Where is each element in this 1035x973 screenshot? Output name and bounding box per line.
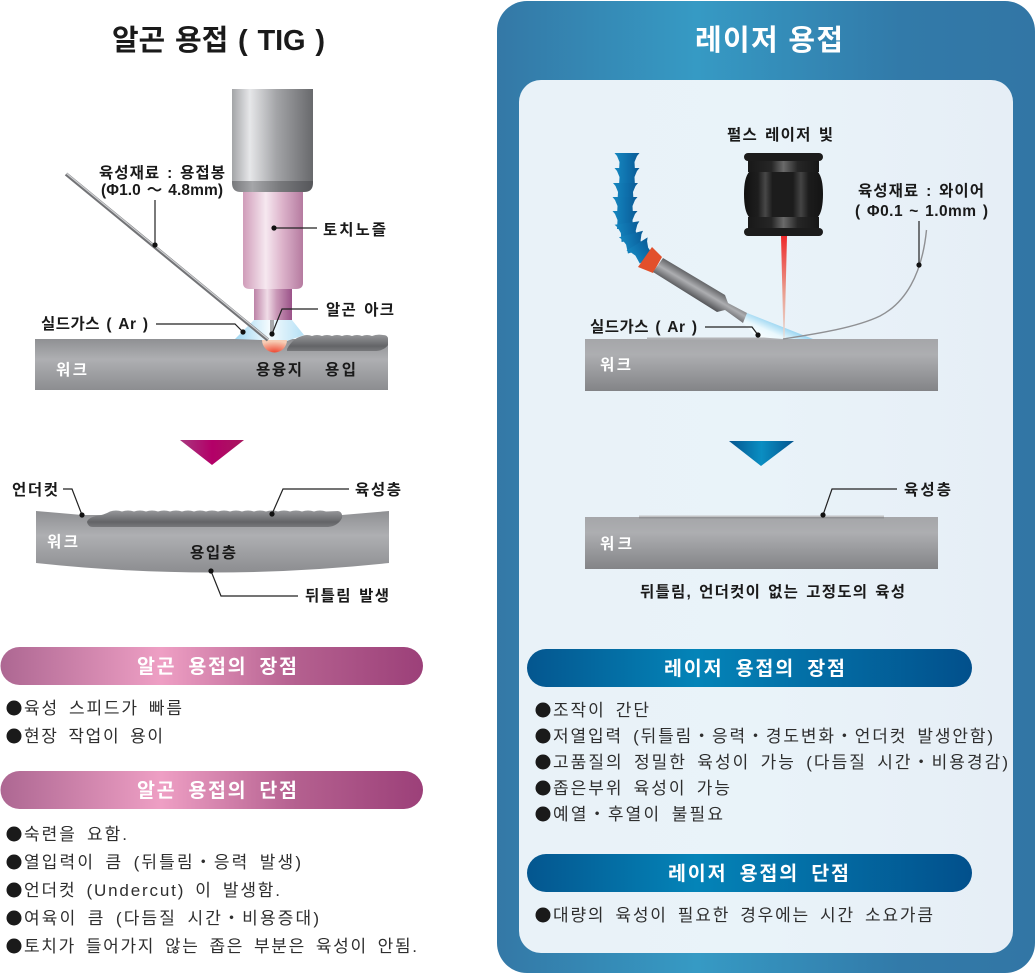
torch nozzle <box>243 192 303 289</box>
diagram: TIG welding <box>35 89 394 390</box>
label: filler wire: 육성재료 : 와이어 <box>858 182 984 200</box>
workpiece <box>35 339 388 390</box>
heading: TIG advantages: 알곤 용접의 장점 <box>137 656 297 678</box>
label: filler wire <box>855 182 988 268</box>
label: build-up layer <box>820 481 951 518</box>
list: laser advantages: 좁은부위 육성이 가능 <box>553 779 730 798</box>
label: molten pool: 용융지 <box>256 361 302 379</box>
list: laser advantages: 저열입력 (뒤틀림・응력・경도변화・언더컷 발생안함) <box>553 727 993 746</box>
label: work: 워크 <box>600 535 632 553</box>
list: TIG disadvantages: 언더컷 (Undercut) 이 발생함. <box>24 881 280 900</box>
label: pulse laser: 펄스 레이저 빛 <box>727 126 833 144</box>
electrode <box>270 320 274 334</box>
torch body <box>232 89 313 192</box>
shield gas cone <box>235 320 304 341</box>
workpiece <box>585 339 938 391</box>
label: undercut: 언더컷 <box>12 481 58 499</box>
list: laser advantages: 고품질의 정밀한 육성이 가능 (다듬질 시간・비용경감) <box>553 753 1008 772</box>
diagram: laser welding <box>585 126 988 391</box>
label: penetration layer: 용입층 <box>190 544 236 562</box>
heading: laser advantages <box>527 649 972 687</box>
distorted workpiece <box>36 511 389 572</box>
heading: laser advantages: 레이저 용접의 장점 <box>664 658 845 680</box>
panel background <box>497 1 1035 973</box>
weld bead <box>287 335 388 351</box>
label: distortion <box>208 568 389 605</box>
label: torch nozzle: 토치노즐 <box>323 221 386 239</box>
label: build-up layer: 육성층 <box>904 481 951 499</box>
deposited layer <box>639 516 884 518</box>
label: work: 워크 <box>56 361 87 379</box>
label: argon arc <box>269 301 394 337</box>
label: work: 워크 <box>47 533 78 551</box>
label: torch nozzle <box>271 221 386 239</box>
inner card <box>519 80 1013 953</box>
label: shield gas <box>41 315 246 335</box>
workpiece <box>585 517 938 569</box>
title: argon welding: 알곤 용접 ( TIG ) <box>112 24 325 57</box>
heading: laser disadvantages: 레이저 용접의 단점 <box>668 863 849 885</box>
label: distortion: 뒤틀림 발생 <box>305 587 389 605</box>
thin deposited layer <box>647 338 783 340</box>
list: TIG advantages: 현장 작업이 용이 <box>24 727 163 746</box>
list: TIG disadvantages: 열입력이 큼 (뒤틀림・응력 발생) <box>24 853 301 872</box>
laser beam <box>781 236 787 338</box>
label: shield gas <box>590 318 761 338</box>
list: TIG disadvantages: 숙련을 요함. <box>24 825 127 844</box>
label: build-up layer: 육성층 <box>355 481 401 499</box>
list: TIG advantages <box>6 699 182 746</box>
laser head <box>744 153 823 236</box>
list: TIG disadvantages: 여육이 큼 (다듬질 시간・비용증대) <box>24 909 319 928</box>
gas stream <box>743 313 813 339</box>
panel: laser welding <box>497 1 1035 973</box>
list: laser advantages <box>536 701 1008 824</box>
label: undercut <box>12 481 85 518</box>
orange collar <box>638 247 662 273</box>
blue hose <box>612 153 657 266</box>
label: work: 워크 <box>600 356 631 374</box>
label: argon arc: 알곤 아크 <box>326 301 394 319</box>
list: laser disadvantages: 대량의 육성이 필요한 경우에는 시간 소요가큼 <box>553 906 933 925</box>
list: laser advantages: 조작이 간단 <box>553 701 649 720</box>
labels: filler rod <box>99 164 225 248</box>
diagram: TIG result <box>12 481 401 605</box>
gun <box>653 258 747 323</box>
label: filler wire: ( Φ0.1 ~ 1.0mm ) <box>855 203 988 220</box>
bead with undercut <box>87 510 342 527</box>
heading: TIG advantages <box>0 647 423 685</box>
caption: 뒤틀림, 언더컷이 없는 고정도의 육성 <box>640 583 905 601</box>
list: TIG disadvantages: 토치가 들어가지 않는 좁은 부분은 육성이 안됨. <box>24 937 417 956</box>
label: penetration: 용입 <box>325 361 356 379</box>
labels: filler rod: 육성재료 : 용접봉 <box>99 164 225 182</box>
filler wire <box>783 230 926 339</box>
filler rod <box>66 173 268 340</box>
labels: filler rod: (Φ1.0 ～ 4.8mm) <box>101 182 223 199</box>
heading: laser disadvantages <box>527 854 972 892</box>
list: laser advantages: 예열・후열이 불필요 <box>553 805 723 824</box>
label: build-up layer <box>269 481 401 517</box>
panel title: 레이저 용접 <box>695 24 843 57</box>
list: TIG disadvantages <box>6 825 417 956</box>
heading: TIG disadvantages: 알곤 용접의 단점 <box>137 780 297 802</box>
nozzle neck <box>254 289 292 320</box>
list: TIG advantages: 육성 스피드가 빠름 <box>24 699 182 718</box>
label: shield gas: 실드가스 ( Ar ) <box>41 315 148 333</box>
arrow: down blue <box>729 441 794 466</box>
label: shield gas: 실드가스 ( Ar ) <box>590 318 697 336</box>
diagram: laser result <box>585 481 951 569</box>
heading: TIG disadvantages <box>0 771 423 809</box>
arrow: down magenta <box>180 440 244 465</box>
melt pool <box>262 340 287 352</box>
